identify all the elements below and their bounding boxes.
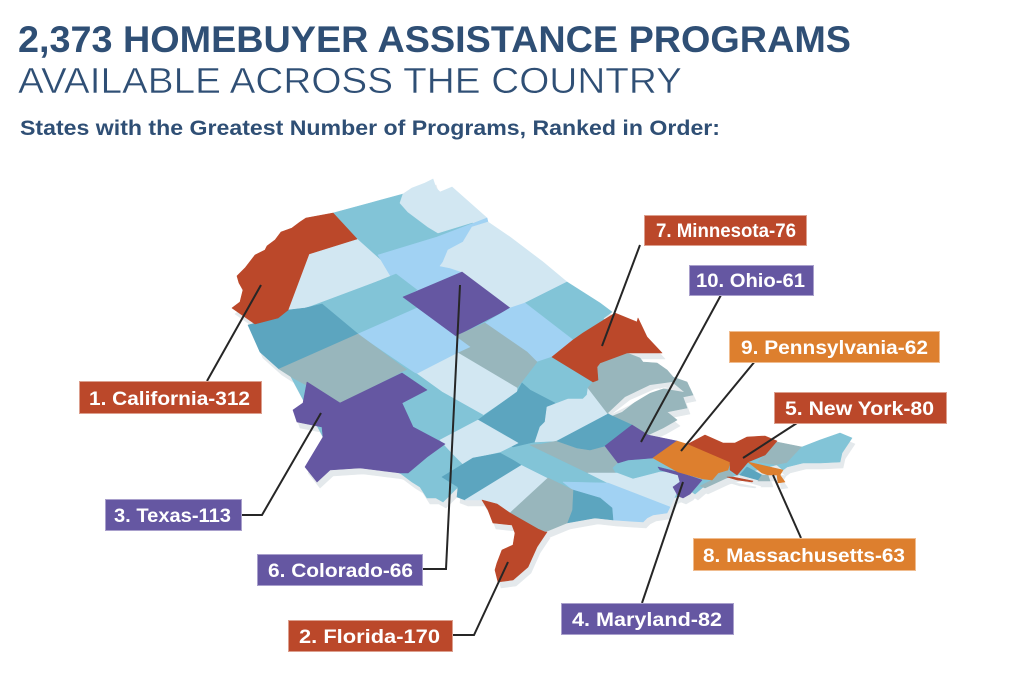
state: Texas — [293, 373, 445, 482]
state: Rhode Island — [758, 475, 770, 481]
state: Wyoming — [358, 308, 471, 374]
state: Alabama — [465, 465, 548, 513]
state: Vermont and New Hampshire — [758, 442, 802, 465]
state: Connecticut — [740, 467, 762, 480]
label: Maryland — [562, 604, 734, 634]
state: Oklahoma — [400, 370, 483, 442]
label: Massachusetts — [694, 538, 916, 570]
state: North Dakota — [485, 303, 573, 362]
leader line: California — [207, 285, 261, 381]
state: Maryland — [658, 467, 702, 498]
map base — [260, 200, 795, 525]
state: Florida — [482, 500, 547, 582]
label: Texas: 3. Texas-113 — [114, 506, 231, 527]
state: Pennsylvania — [653, 441, 730, 480]
label: Colorado: 6. Colorado-66 — [268, 561, 413, 582]
leader line: Colorado — [423, 285, 460, 569]
leader line: Texas — [241, 413, 321, 515]
title line 1: 2,373 HOMEBUYER ASSISTANCE PROGRAMS — [18, 19, 851, 60]
label: Massachusetts: 8. Massachusetts-63 — [703, 546, 905, 567]
label: Minnesota — [644, 216, 806, 246]
state: South Carolina — [567, 490, 613, 523]
state: Ohio — [605, 425, 677, 463]
label: Florida: 2. Florida-170 — [299, 627, 440, 648]
state: Missouri — [478, 383, 555, 447]
state: Montana — [440, 222, 567, 308]
state: New York — [688, 435, 777, 475]
state: Arkansas — [440, 420, 518, 465]
label: Pennsylvania: 9. Pennsylvania-62 — [741, 338, 928, 359]
label: Colorado — [258, 554, 422, 586]
leader line: Minnesota — [602, 245, 640, 346]
title line 2: AVAILABLE ACROSS THE COUNTRY — [18, 60, 682, 101]
state: Louisiana — [400, 442, 463, 502]
state: Virginia — [588, 472, 680, 507]
state: Nevada — [288, 239, 396, 310]
label: Maryland: 4. Maryland-82 — [572, 610, 722, 631]
state: New Mexico — [279, 334, 407, 403]
state: Iowa — [517, 357, 593, 403]
state: Washington — [400, 179, 487, 233]
state: Maine — [777, 433, 852, 470]
map of the United States — [232, 179, 852, 582]
state: Oregon — [333, 194, 437, 255]
state: Mississippi — [442, 453, 522, 500]
label: Pennsylvania — [730, 332, 940, 362]
state: Long Island — [727, 477, 753, 482]
state: Colorado — [403, 272, 510, 336]
state: Wisconsin and Michigan — [588, 353, 693, 435]
state: Kentucky — [530, 441, 618, 473]
state: South Dakota — [525, 282, 612, 340]
leader line: Massachusetts — [773, 475, 801, 538]
state: Tennessee — [503, 447, 608, 483]
state: Massachusetts — [748, 462, 785, 483]
state: Illinois — [535, 388, 610, 442]
leader line: Florida — [452, 562, 508, 635]
label: Ohio — [690, 266, 814, 296]
label: New York: 5. New York-80 — [785, 399, 934, 420]
label: Ohio: 10. Ohio-61 — [696, 271, 805, 292]
label: Texas — [106, 500, 242, 530]
label: Minnesota: 7. Minnesota-76 — [656, 221, 796, 242]
label: California — [80, 382, 262, 414]
label: New York — [774, 392, 946, 424]
leader line: Pennsylvania — [681, 360, 756, 451]
leader line: Maryland — [642, 482, 683, 603]
leader line: New York — [743, 423, 797, 458]
state: Arizona — [248, 304, 358, 369]
state: Idaho — [378, 218, 488, 297]
state: Utah — [322, 274, 421, 334]
state: North Carolina — [563, 482, 670, 522]
state: Kansas — [456, 323, 537, 388]
state: Delaware — [692, 480, 711, 494]
leader line: Ohio — [641, 295, 721, 442]
state: Georgia — [510, 478, 573, 532]
state: California — [232, 213, 357, 324]
state: Minnesota — [552, 313, 662, 382]
lake shadow — [608, 382, 684, 416]
label: California: 1. California-312 — [89, 389, 250, 410]
subtitle: States with the Greatest Number of Programs, Ranked in Order: — [20, 117, 720, 140]
state: Indiana — [557, 414, 632, 450]
state: West Virginia — [613, 458, 677, 479]
state: New Jersey — [700, 470, 733, 488]
state: Nebraska — [417, 353, 517, 415]
lake — [612, 387, 668, 414]
label: Florida — [288, 620, 452, 652]
